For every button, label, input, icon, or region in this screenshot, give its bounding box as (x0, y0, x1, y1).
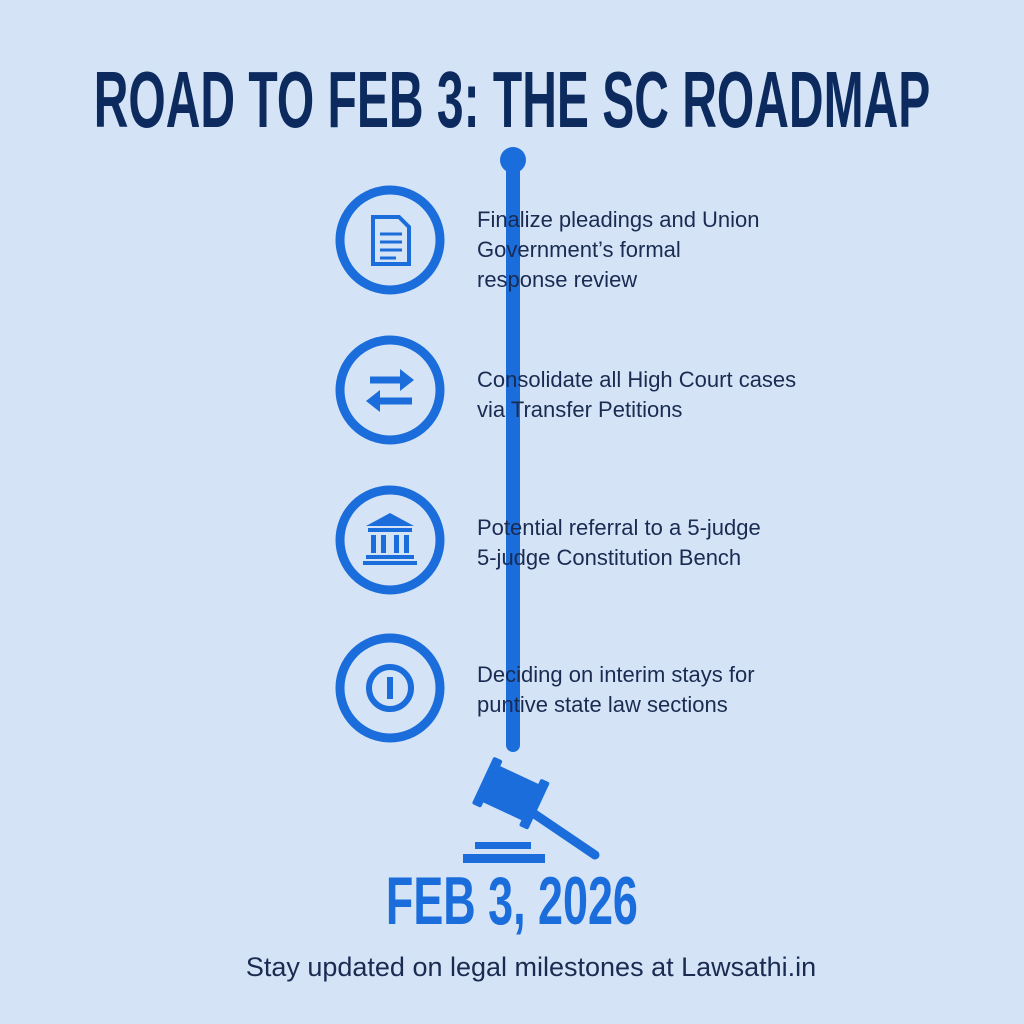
icon: transfer arrows (336, 336, 444, 444)
text: step 3: 5-judge Constitution Bench (477, 545, 741, 570)
icon: gavel (463, 757, 600, 863)
text: step 4: Deciding on interim stays for (477, 662, 755, 687)
text: step 1: Government’s formal (477, 237, 681, 262)
text: step 3: Potential referral to a 5-judge (477, 515, 761, 540)
text: step 2: Consolidate all High Court cases (477, 367, 796, 392)
icon: document (336, 186, 444, 294)
text: step 1: response review (477, 267, 637, 292)
icon: pause (336, 634, 444, 742)
footer: Stay updated on legal milestones at Lawsathi.in (246, 952, 816, 982)
text: step 4 (477, 662, 755, 717)
icon: court building (336, 486, 444, 594)
text: step 1 (477, 207, 760, 292)
title: ROAD TO FEB 3: THE SC ROADMAP (94, 55, 930, 144)
text: step 3 (477, 515, 761, 570)
text: step 4: puntive state law sections (477, 692, 728, 717)
text: step 2: via Transfer Petitions (477, 397, 682, 422)
text: step 2 (477, 367, 796, 422)
text: step 1: Finalize pleadings and Union (477, 207, 760, 232)
date: FEB 3, 2026 (386, 863, 638, 939)
